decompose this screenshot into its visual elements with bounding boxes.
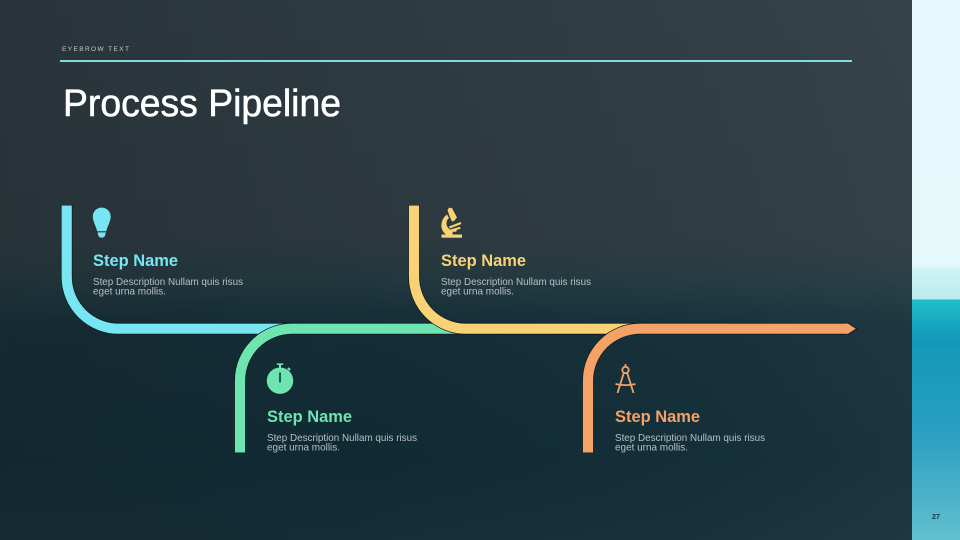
step name: Step Name [93, 252, 178, 270]
step description: eget urna mollis. [615, 442, 688, 454]
icon: stopwatch [267, 363, 293, 394]
eyebrow text: EYEBROW TEXT [62, 46, 129, 53]
step description: eget urna mollis. [267, 442, 340, 454]
step name: Step Name [615, 408, 700, 426]
pipeline segment: yellow [414, 205, 650, 329]
title: Process Pipeline [63, 83, 341, 125]
step description: eget urna mollis. [441, 286, 514, 298]
pipeline segment: green [240, 329, 480, 453]
step description: Step Description Nullam quis risus [93, 276, 243, 288]
step description: Step Description Nullam quis risus [267, 432, 417, 444]
icon: light bulb [93, 208, 111, 238]
step name: Step Name [441, 252, 526, 270]
step 2: green [267, 363, 417, 454]
icon: drafting compass [616, 364, 636, 393]
page number: 27 [932, 512, 940, 521]
step description: eget urna mollis. [93, 286, 166, 298]
pipeline segment: blue [67, 205, 300, 329]
right side ocean panel [912, 0, 960, 540]
step description: Step Description Nullam quis risus [615, 432, 765, 444]
header rule [60, 60, 852, 62]
pipeline segment: orange with arrow head [588, 323, 858, 453]
step name: Step Name [267, 408, 352, 426]
step 3: yellow [441, 208, 591, 298]
icon: microscope [441, 208, 462, 238]
step 1: blue [93, 208, 243, 298]
step description: Step Description Nullam quis risus [441, 276, 591, 288]
step 4: orange [615, 364, 765, 454]
